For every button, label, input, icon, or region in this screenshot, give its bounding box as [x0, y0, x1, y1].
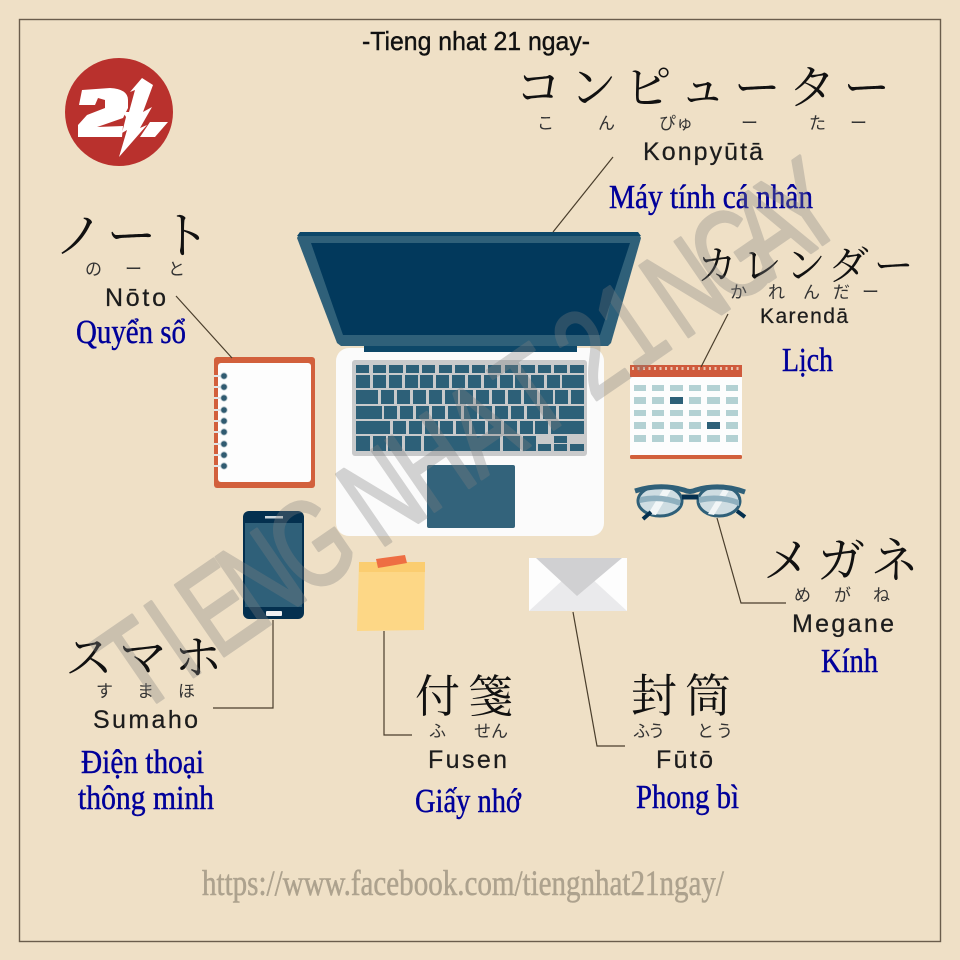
label: computer: Máy tính cá nhân: [609, 179, 813, 216]
label: computer: ー: [741, 109, 758, 134]
label: glasses: め: [794, 581, 811, 606]
label: smartphone: スマホ: [65, 619, 229, 688]
label: computer: Konpyūtā: [643, 138, 763, 166]
label: notebook: ノート: [54, 196, 214, 268]
label: computer: ん: [598, 109, 615, 134]
title: -Tieng nhat 21 ngay-: [362, 26, 590, 56]
label: notebook: ー: [125, 255, 142, 280]
label: computer: [515, 51, 898, 216]
label: sticky note: せん: [474, 717, 508, 742]
label: calendar: [697, 234, 918, 379]
label: glasses: Kính: [821, 643, 878, 680]
label: envelope: Phong bì: [636, 779, 739, 816]
laptop base: [336, 348, 604, 536]
label: computer: ぴゅ: [659, 109, 693, 134]
leader lines: [176, 157, 786, 746]
icon: envelope: [529, 558, 627, 611]
label: smartphone: [65, 619, 229, 817]
label: smartphone: ほ: [178, 677, 195, 702]
label: calendar: カレンダー: [697, 234, 918, 291]
icon: smartphone: [243, 511, 304, 619]
trackpad: [427, 465, 515, 528]
label: notebook: と: [168, 255, 185, 280]
label: sticky note: [415, 660, 522, 820]
keyboard: [352, 360, 587, 456]
label: smartphone: Điện thoại: [81, 744, 204, 781]
label: glasses: ね: [873, 581, 890, 606]
label: notebook: Nōto: [105, 284, 166, 312]
label: calendar: だ: [833, 278, 850, 303]
laptop: [297, 232, 641, 536]
label: calendar: ー: [862, 278, 879, 303]
notebook spiral: [214, 373, 227, 469]
label: sticky note: 付箋: [415, 660, 521, 725]
logo: 21 badge: [65, 58, 173, 166]
label: computer: こ: [537, 109, 554, 134]
label: glasses: Megane: [792, 610, 894, 638]
watermark: TIENG NHAT 21 NGAY: [74, 133, 866, 738]
label: calendar: Lịch: [782, 342, 833, 379]
label: notebook: の: [85, 255, 102, 280]
label: calendar: れ: [768, 278, 785, 303]
label: calendar: か: [730, 278, 747, 303]
icon: glasses: [635, 486, 745, 519]
icon: sticky note: [357, 555, 425, 631]
icon: notebook: [214, 357, 315, 488]
label: glasses: [763, 522, 925, 680]
label: notebook: [54, 196, 214, 351]
laptop screen: [297, 232, 641, 346]
label: smartphone: thông minh: [78, 780, 214, 817]
label: glasses: が: [834, 581, 851, 606]
label: sticky note: ふ: [429, 717, 446, 742]
label: computer: コンピューター: [515, 51, 898, 118]
label: envelope: [631, 660, 739, 816]
label: glasses: メガネ: [763, 522, 925, 591]
label: computer: ー: [850, 109, 867, 134]
label: smartphone: ま: [137, 677, 154, 702]
label: envelope: 封筒: [631, 660, 739, 726]
label: sticky note: Giấy nhớ: [415, 783, 522, 820]
label: envelope: ふう: [633, 717, 665, 742]
label: envelope: とう: [697, 717, 733, 742]
label: computer: た: [809, 109, 826, 134]
label: sticky note: Fusen: [428, 746, 507, 774]
label: notebook: Quyển sổ: [76, 314, 186, 351]
label: smartphone: す: [96, 677, 113, 702]
label: envelope: Fūtō: [656, 746, 713, 774]
label: calendar: Karendā: [760, 305, 848, 328]
icon: calendar: [630, 365, 742, 459]
label: smartphone: Sumaho: [93, 706, 198, 734]
label: calendar: ん: [803, 278, 820, 303]
url: https://www.facebook.com/tiengnhat21ngay/: [202, 863, 724, 903]
